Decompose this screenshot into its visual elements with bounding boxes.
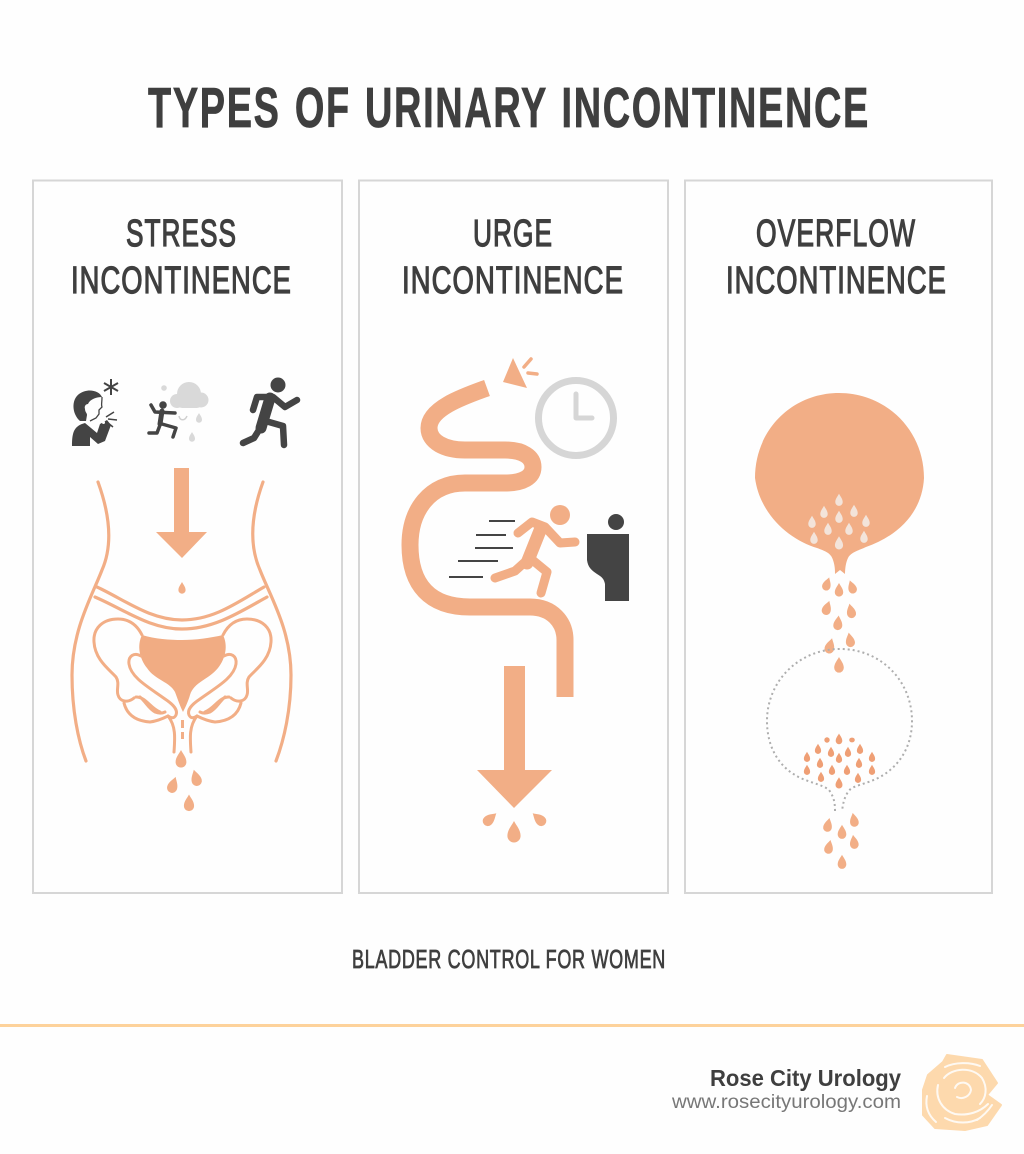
urethra dashes: [181, 720, 184, 739]
left pelvic bone: [94, 619, 177, 752]
icon: toilet and person: [587, 514, 629, 601]
splash drops: [481, 810, 548, 842]
heading: overflow incontinence: OVERFLOW: [756, 213, 916, 255]
subtitle: BLADDER CONTROL FOR WOMEN: [352, 944, 666, 974]
falling drops from empty bladder: [822, 812, 859, 869]
arrow: downward pressure: [156, 468, 207, 558]
footer divider: [0, 1024, 1024, 1027]
leaking drops: [166, 750, 203, 811]
heading: urge incontinence: INCONTINENCE: [402, 260, 624, 302]
icon: rushing person: [495, 505, 575, 593]
panel: stress incontinence: [33, 180, 342, 893]
panel: overflow incontinence: [685, 180, 992, 893]
small drop below arrow: [178, 582, 186, 594]
icon: alert burst: [503, 358, 537, 388]
bladder: [139, 635, 226, 712]
heading: urge incontinence: URGE: [473, 213, 553, 255]
heading: stress incontinence: INCONTINENCE: [71, 260, 292, 302]
icon: figure under rain cloud: [149, 382, 208, 442]
footer brand text: www.rosecityurology.com: [671, 1091, 901, 1113]
waist and hip contour: [72, 482, 291, 761]
winding urgency path: [410, 388, 565, 697]
right pelvic bone: [188, 619, 271, 752]
panel frame: [33, 180, 342, 893]
illustration: female pelvis with leaking bladder: [72, 482, 291, 811]
drops inside full bladder: [808, 494, 870, 549]
panel frame: [359, 180, 668, 893]
drops inside empty bladder: [804, 734, 875, 789]
panel: urge incontinence: [359, 180, 668, 893]
icon: running person: [243, 378, 297, 445]
icon: coughing person: [72, 379, 118, 446]
dashed empty bladder outline: [767, 649, 912, 811]
heading: urge incontinence: [402, 213, 624, 302]
falling drops from full bladder: [821, 576, 858, 673]
footer brand text: Rose City Urology: [710, 1065, 901, 1091]
icon: clock: [538, 380, 614, 456]
panel frame: [685, 180, 992, 893]
heading: overflow incontinence: [726, 213, 947, 302]
full bladder: [755, 393, 924, 574]
heading: stress incontinence: STRESS: [126, 213, 237, 255]
arrow: downward: [477, 666, 552, 808]
heading: stress incontinence: [71, 213, 292, 302]
logo: rose: [923, 1055, 1001, 1130]
speed lines: [449, 521, 515, 577]
footer brand text: [671, 1065, 901, 1113]
